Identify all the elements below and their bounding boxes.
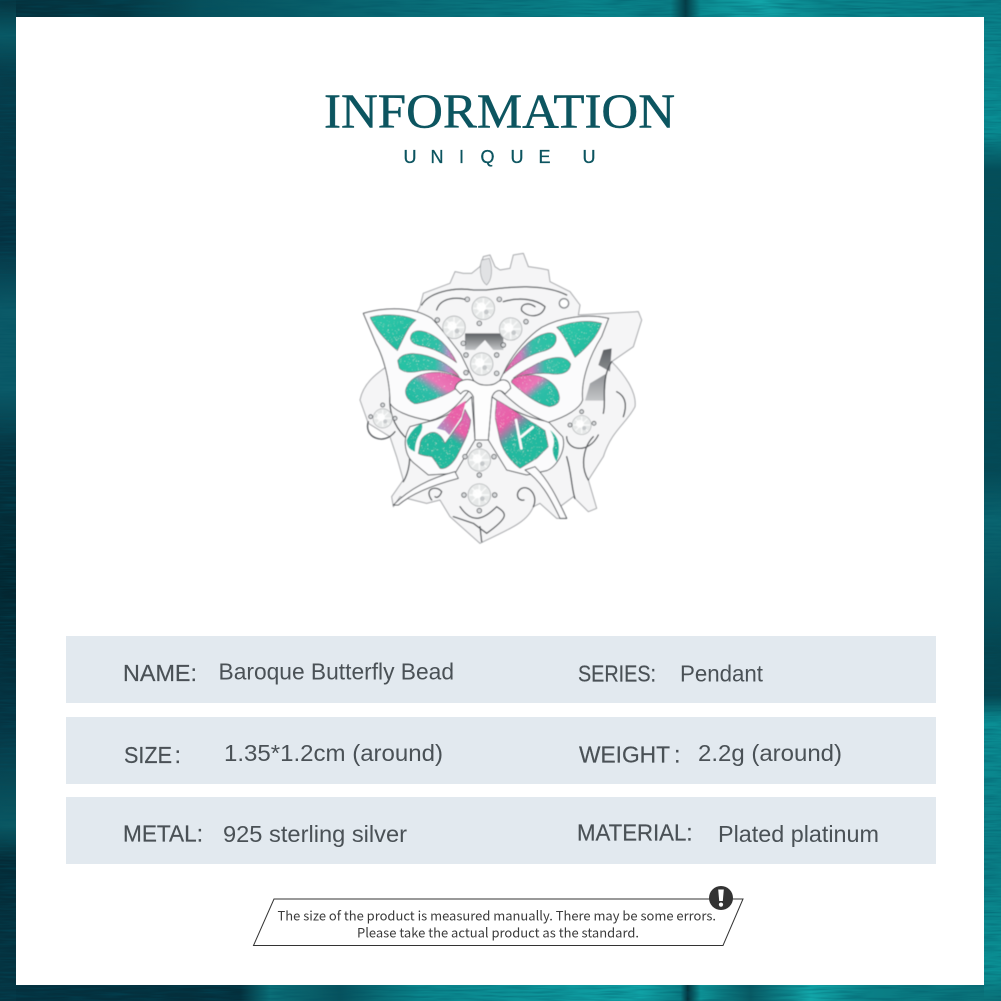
weight label: WEIGHT [579, 742, 670, 768]
subtitle: UNIQUE U [404, 147, 596, 167]
lower left wing [393, 397, 475, 505]
material value: Plated platinum [718, 821, 879, 847]
metal label: METAL: [123, 820, 203, 846]
disclaimer note [254, 886, 743, 946]
left tail [393, 472, 458, 505]
series value: Pendant [680, 660, 763, 686]
butterfly body [455, 380, 511, 440]
note text: Please take the actual product as the standard. [357, 922, 639, 942]
right tail [525, 467, 567, 518]
upper right wing [497, 316, 609, 422]
icon: warning exclamation [709, 886, 733, 910]
info row 2 background [66, 717, 936, 784]
upper left wing [363, 309, 475, 421]
note text [278, 906, 716, 942]
note text: The size of the product is measured manually. There may be some errors. [278, 906, 716, 924]
material label: MATERIAL: [577, 820, 692, 846]
lower right wing [488, 397, 567, 518]
note parallelogram outline [254, 899, 743, 946]
size value: 1.35*1.2cm (around) [224, 740, 443, 766]
crystal gems [369, 297, 596, 513]
size label: SIZE [124, 742, 172, 768]
product image: butterfly charm bead [359, 252, 643, 544]
info row 1 background [66, 636, 936, 703]
metal value: 925 sterling silver [223, 821, 407, 847]
name value: Baroque Butterfly Bead [218, 658, 454, 684]
weight value: 2.2g (around) [698, 740, 842, 766]
info table text [123, 658, 879, 847]
name label: NAME: [123, 660, 197, 686]
info row 3 background [66, 797, 936, 864]
bead ornament silhouette [360, 253, 642, 543]
size label: : [174, 742, 181, 768]
bead artwork [360, 253, 642, 543]
title: INFORMATION [324, 86, 675, 138]
weight label: : [674, 742, 681, 768]
series label: SERIES: [578, 660, 656, 686]
